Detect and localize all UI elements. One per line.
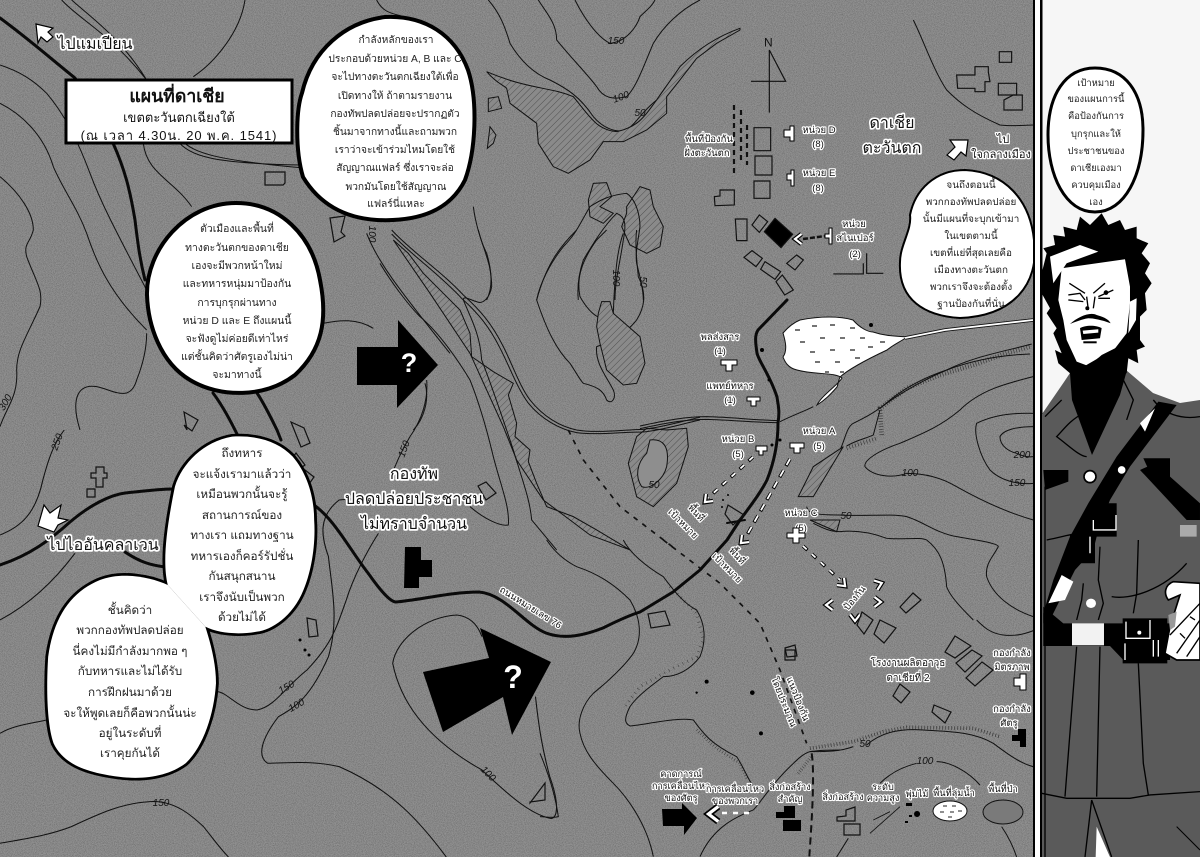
speech bubble: main force: ประกอบด้วยหน่วย A, B และ C (328, 53, 462, 65)
speech bubble: main force: พวกมันโดยใช้สัญญาณ (346, 180, 447, 193)
legend: bottom row (652, 768, 1023, 835)
contour elevation labels: 200 (1013, 450, 1031, 461)
bubble text: weak army (63, 601, 197, 760)
unit labels north: หน่วย D (802, 125, 836, 136)
speech bubble: invasion plan (900, 170, 1035, 318)
contour elevation labels: 50 (648, 480, 660, 491)
cliffs and contours south-centre (540, 540, 840, 857)
bubble text: weak army: กับทหารและไม่ได้รับ (78, 664, 182, 678)
unit labels centre: (5) (732, 449, 744, 460)
bubble text: soldiers report: กันสนุกสนาน (209, 570, 275, 583)
speech bubble: west side of town: จะฟังดูไม่ค่อยดีเท่าไหร่ (186, 332, 289, 345)
speech bubble: plan goal: เป้าหมาย (1077, 77, 1115, 88)
unit labels north: ฝั่งตะวันตก (684, 146, 730, 159)
shoulder strap and pouches (1043, 373, 1200, 623)
target area labels: เป้าหมาย (665, 507, 700, 542)
contour north-east (913, 20, 1033, 126)
contour elevation labels: 50 (634, 108, 646, 119)
contours and cliffs north-centre (473, 0, 740, 300)
speech bubble: invasion plan: พวกกองทัพปลดปล่อย (926, 197, 1016, 208)
title box: แผนที่ดาเชีย (129, 83, 225, 106)
contours and cliffs south-east (810, 620, 1035, 857)
speech bubble: plan goal (1048, 68, 1143, 212)
speech bubble: main force: สัญญาณแฟลร์ ซึ่งเราจะล่อ (336, 160, 454, 174)
speech bubble: plan goal: ควบคุมเมือง (1071, 179, 1121, 191)
legend: bottom row: ของพวกเรา (712, 796, 758, 806)
title box (66, 80, 292, 143)
legend: bottom row: พื้นที่ลุ่มน้ำ (933, 785, 975, 799)
speech bubble: invasion plan: พวกเราจึงจะต้องตั้ง (930, 279, 1012, 293)
main roads (0, 18, 787, 636)
speech bubble: plan goal: คือป้องกันการ (1068, 110, 1124, 121)
enemy unknown arrow large (423, 628, 551, 735)
western defence dashes (734, 105, 747, 175)
enemy unknown arrow large: ? (503, 659, 523, 695)
contour elevation labels (0, 36, 1031, 809)
unit labels north: สไนเปอร์ (836, 232, 874, 244)
place arrow: to Maepian: ไปแมเปียน (56, 34, 133, 53)
contour elevation labels: 100 (917, 756, 934, 767)
unit labels centre: พลส่งสาร (701, 332, 739, 343)
speech bubble: main force: เปิดทางให้ ถ้าตามรายงาน (338, 90, 452, 102)
speech bubble: main force: กำลังหลักของเรา (359, 35, 433, 46)
contours and cliffs east (640, 344, 1033, 620)
bubble text: soldiers report (190, 447, 294, 624)
speech bubble: plan goal: ของแผนการนี้ (1068, 92, 1125, 104)
contour elevation labels: 150 (397, 439, 413, 459)
legend: allied force: มิตรภาพ (994, 662, 1030, 673)
speech bubble: invasion plan: เมืองทางตะวันตก (934, 264, 1008, 276)
speech bubble: west side of town: ทางตะวันตกของดาเชีย (185, 241, 289, 254)
defence line label: แนวป้องกัน (783, 675, 811, 723)
contour elevation labels: 150 (1009, 478, 1026, 489)
legend: allied force (993, 648, 1031, 690)
speech bubble: west side of town (147, 203, 323, 393)
hand (1165, 582, 1200, 660)
lake marsh hatching (795, 325, 885, 372)
legend: bottom row: พื้นที่ป่า (988, 781, 1018, 794)
unit labels centre (701, 332, 836, 534)
arrow to city centre: ใจกลางเมือง (971, 148, 1031, 161)
bubble text: soldiers report: ทหารเองก็คอร์รัปชั่น (191, 548, 293, 563)
attack arrows to target areas (701, 457, 884, 621)
bubble text: soldiers report: สถานการณ์ของ (202, 508, 282, 522)
legend: bottom row: สิ่งก่อสร้าง (769, 780, 811, 792)
settlement buildings north and centre (714, 52, 1022, 295)
label: liberation army unknown strength (345, 466, 483, 533)
hair (1042, 213, 1152, 373)
speech bubble: west side of town: เองจะมีพวกหน้าใหม่ (192, 259, 282, 272)
label: West Dacia (863, 114, 921, 157)
speech bubble: main force: แฟลร์นี่แหละ (367, 196, 425, 210)
unit labels centre: (1) (714, 346, 726, 357)
contour elevation labels: 50 (859, 739, 871, 750)
unit labels centre: หน่วย B (722, 434, 754, 445)
belt buckle and pouch (1042, 487, 1200, 857)
speech bubble: plan goal: เอง (1089, 196, 1103, 207)
contour elevation labels: 100 (902, 468, 919, 479)
unit labels north: หน่วย E (803, 168, 835, 179)
arrow to city centre: ไป (996, 133, 1009, 146)
contour elevation labels: 50 (637, 276, 648, 288)
bubble text: soldiers report: ถึงทหาร (221, 447, 263, 460)
target area labels: พื้นที่ (726, 544, 749, 567)
bubble text: weak army: พวกกองทัพปลดปล่อย (76, 624, 184, 637)
speech bubble: invasion plan: ฐานป้องกันที่นั่น (937, 297, 1005, 310)
lake (783, 317, 907, 405)
speech bubble: main force: จะไปทางตะวันตกเฉียงใต้เพื่อ (331, 69, 459, 83)
contour lines west (0, 0, 450, 430)
title box: เขตตะวันตกเฉียงใต้ (123, 110, 235, 125)
label: liberation army unknown strength: ไม่ทราบจำนวน (359, 514, 467, 533)
legend: bottom row: ความสูง (867, 793, 899, 804)
arrow to city centre (947, 133, 1031, 161)
label: West Dacia: ตะวันตก (863, 140, 921, 157)
face (1050, 245, 1137, 370)
target area labels: ป้องกัน (842, 584, 869, 613)
unit icons north (784, 126, 832, 244)
unit labels centre: หน่วย A (803, 426, 836, 437)
contour elevation labels: 100 (287, 697, 307, 715)
scattered dots (298, 323, 873, 656)
legend: bottom row: ระดับ (872, 782, 894, 792)
contour elevation labels: 100 (610, 270, 621, 287)
legend: enemy force (993, 704, 1031, 747)
road number label: ถนนหมายเลข 76 (497, 584, 563, 631)
unit labels centre: (5) (795, 523, 807, 534)
legend: bottom row: สำคัญ (778, 794, 803, 804)
speech bubble: west side of town: การบุกรุกผ่านทาง (197, 298, 277, 309)
legend: enemy force: กองกำลัง (993, 704, 1031, 715)
bubble text: weak army: อยู่ในระดับที่ (99, 725, 161, 741)
bubble text: soldiers report: เราจึงนับเป็นพวก (199, 589, 285, 604)
contour elevation labels: 100 (478, 764, 498, 784)
speech bubble: main force: ชิ้นมาจากทางนี้และถามพวก (333, 123, 457, 138)
legend symbols (662, 800, 1023, 835)
bubble text: weak army: นี่คงไม่มีกำลังมากพอ ๆ (73, 643, 187, 658)
contour elevation labels: 250 (49, 432, 66, 453)
enemy unknown arrow small (357, 320, 438, 408)
river (905, 320, 1033, 338)
place arrow: to Io-an Kalawen: ไปไออันคลาเวน (45, 535, 159, 554)
defence line label: โดยประมาณ (768, 675, 799, 729)
speech bubble: main force (297, 17, 474, 220)
contour elevation labels: 150 (277, 679, 297, 697)
panel borders (1033, 0, 1035, 857)
contour elevation labels: 100 (366, 226, 377, 243)
enemy building (404, 547, 432, 588)
contour elevation labels: 100 (611, 89, 631, 106)
unit labels north: (2) (849, 249, 861, 260)
neck and collar (1070, 370, 1127, 455)
small buildings west (87, 172, 797, 803)
contour elevation labels: 150 (608, 36, 625, 47)
unit labels north: พื้นที่ป้องกัน (685, 132, 733, 145)
label: liberation army unknown strength: กองทัพ (390, 466, 438, 483)
speech bubble: invasion plan: นั้นมีแผนที่จะบุกเข้ามา (923, 211, 1019, 225)
legend: bottom row: พุ่มไม้ (906, 789, 928, 800)
speech bubble: west side of town: หน่วย D และ E ถึงแผนนี้ (183, 313, 292, 327)
legend: bottom row: คาดการณ์ (660, 768, 702, 779)
factory label: ดาเชียที่ 2 (886, 670, 930, 684)
place arrow: to Maepian (36, 24, 133, 53)
unit labels north: (8) (812, 139, 824, 150)
bubble text: soldiers report: เหมือนพวกนั้นจะรู้ (196, 485, 288, 502)
legend: bottom row: การเคลื่อนไหว (706, 782, 764, 794)
place arrow: to Io-an Kalawen (38, 505, 159, 554)
unit labels centre: แพทย์ทหาร (706, 380, 754, 392)
speech bubble: west side of town: ตัวเมืองและพื้นที่ (200, 221, 274, 235)
speech bubble: invasion plan: เขตที่แย่ที่สุดเลยคือ (930, 246, 1012, 259)
legend: allied force: กองกำลัง (993, 648, 1031, 659)
bubble text: soldiers report: ด้วยไม่ได้ (218, 610, 266, 624)
unit labels north (684, 125, 874, 260)
target area labels: พื้นที่ (685, 501, 708, 524)
contour elevation labels: 150 (153, 798, 170, 809)
legend: bottom row: ของศัตรู (664, 793, 698, 804)
bubble text: weak army: จะให้พูดเลยก็คือพวกนั้นน่ะ (63, 704, 197, 721)
speech bubble: plan goal: ประชาชนของ (1067, 145, 1125, 156)
uniform body (1042, 370, 1200, 857)
bubble text: soldiers report: จะแจ้งเรามาแล้วว่า (193, 468, 291, 481)
bubble text: soldiers report: ทางเรา แถมทางฐาน (190, 529, 294, 542)
unit labels north: (8) (812, 183, 824, 194)
speech bubble: plan goal: บุกรุกและให้ (1071, 128, 1121, 140)
speech bubble: invasion plan: ในเขตตามนี้ (944, 228, 998, 242)
speech bubble: main force: กองทัพปลดปล่อยจะปรากฏตัว (330, 109, 460, 120)
speech bubble: west side of town: จะมาทางนี้ (212, 367, 262, 381)
unit labels centre: หน่วย C (784, 508, 818, 519)
speech bubble: main force: เราว่าจะเข้าร่วมไหมโดยใช้ (335, 143, 455, 156)
label: West Dacia: ดาเชีย (869, 114, 915, 132)
contour lines south-west (0, 430, 557, 857)
road and cliffs centre (380, 230, 700, 550)
character: officer in uniform (1042, 213, 1200, 857)
bubble text: weak army: การฝึกฝนมาด้วย (88, 686, 172, 699)
speech bubble: west side of town: แต่ชั้นคิดว่าศัตรูเองไม่น่า (181, 349, 293, 363)
speech bubble: invasion plan: จนถึงตอนนี้ (946, 177, 996, 191)
enemy unknown arrow small: ? (401, 348, 417, 378)
legend: enemy force: ศัตรู (1000, 718, 1018, 729)
north compass: N (764, 36, 773, 50)
factory buildings (785, 593, 993, 723)
bubble text: weak army: เราคุยกันได้ (100, 746, 160, 760)
merged speech bubbles (47, 436, 315, 778)
speech bubble: plan goal: ดาเชียเองมา (1070, 162, 1122, 173)
target area labels: เป้าหมาย (709, 551, 744, 586)
defence line label (768, 675, 811, 729)
unit labels north: หน่วย (842, 219, 866, 230)
unit labels centre: (1) (724, 395, 736, 406)
unit icons centre (721, 360, 805, 543)
label: liberation army unknown strength: ปลดปล่อยประชาชน (345, 491, 483, 508)
speech bubble: west side of town: และทหารหนุ่มมาป้องกัน (183, 278, 291, 290)
contour elevation labels: 50 (840, 511, 852, 522)
unit labels centre: (5) (813, 441, 825, 452)
legend: bottom row: สิ่งก่อสร้าง (822, 790, 864, 802)
factory label (871, 656, 945, 684)
title box: (ณ เวลา 4.30น. 20 พ.ค. 1541) (81, 128, 277, 143)
legend: bottom row: การเคลื่อนไหว (652, 779, 710, 791)
bubble text: weak army: ชั้นคิดว่า (108, 601, 152, 617)
north compass (751, 36, 786, 113)
target area labels (665, 501, 869, 613)
factory label: โรงงานผลิตอาวุธ (871, 656, 945, 669)
